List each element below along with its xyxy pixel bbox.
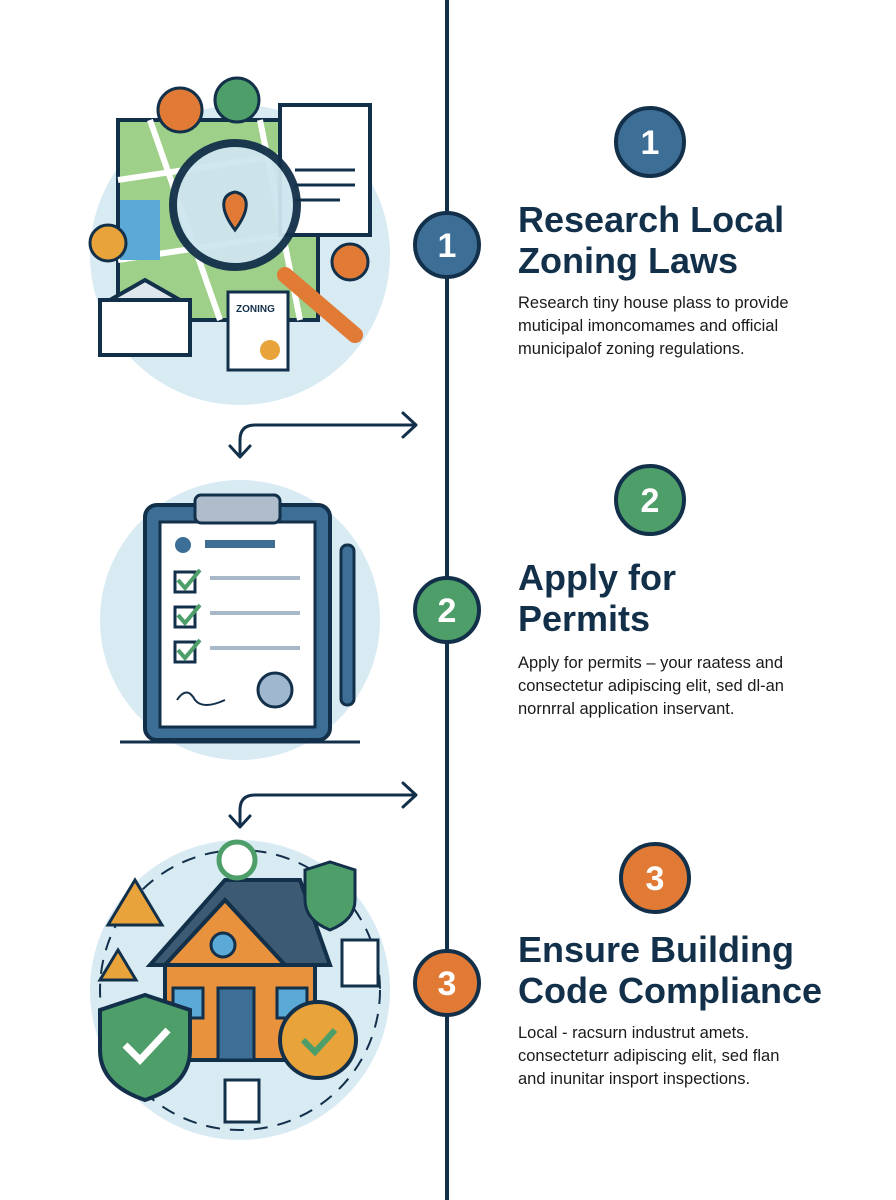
step 1 body: muticipal imoncomames and official — [518, 317, 778, 335]
step 3 marker on timeline — [415, 951, 479, 1015]
step 3 number badge: 3 — [646, 860, 664, 898]
step 1 number badge — [616, 108, 684, 176]
step 3 body: and inunitar insport inspections. — [518, 1070, 750, 1088]
step 3 marker on timeline: 3 — [438, 965, 456, 1003]
step 1 heading: Zoning Laws — [518, 240, 738, 281]
step 2 marker on timeline: 2 — [438, 592, 456, 630]
step 1 number badge: 1 — [641, 124, 659, 162]
step 1 body: Research tiny house plass to provide — [518, 294, 789, 312]
step 2 marker on timeline — [415, 578, 479, 642]
illustration 3: building code compliance house — [90, 840, 390, 1140]
step 2 heading: Permits — [518, 598, 650, 639]
step 3 body: Local - racsurn industrut amets. — [518, 1024, 749, 1042]
step 3 body: consecteturr adipiscing elit, sed flan — [518, 1047, 779, 1065]
step 1 marker on timeline — [415, 213, 479, 277]
arrow 1 — [230, 413, 416, 457]
step 2 heading: Apply for — [518, 557, 676, 598]
step 1 heading: Research Local — [518, 199, 784, 240]
step 2 body: consectetur adipiscing elit, sed dl-an — [518, 677, 784, 695]
step 1 marker on timeline: 1 — [438, 227, 456, 265]
step 3 heading: Ensure Building — [518, 929, 794, 970]
step 2 body: Apply for permits – your raatess and — [518, 654, 783, 672]
step 3 heading: Code Compliance — [518, 970, 822, 1011]
step 2 number badge: 2 — [641, 482, 659, 520]
step 2 number badge — [616, 466, 684, 534]
step 2 body: nornrral application inservant. — [518, 700, 734, 718]
illustration 1: zoning map: ZONING — [236, 304, 275, 315]
step 3 number badge — [621, 844, 689, 912]
step 1 body: municipalof zoning regulations. — [518, 340, 745, 358]
arrow 2 — [230, 783, 416, 827]
illustration 1: zoning map — [90, 78, 390, 405]
timeline line — [445, 0, 449, 1200]
illustration 2: permit clipboard — [100, 480, 380, 760]
